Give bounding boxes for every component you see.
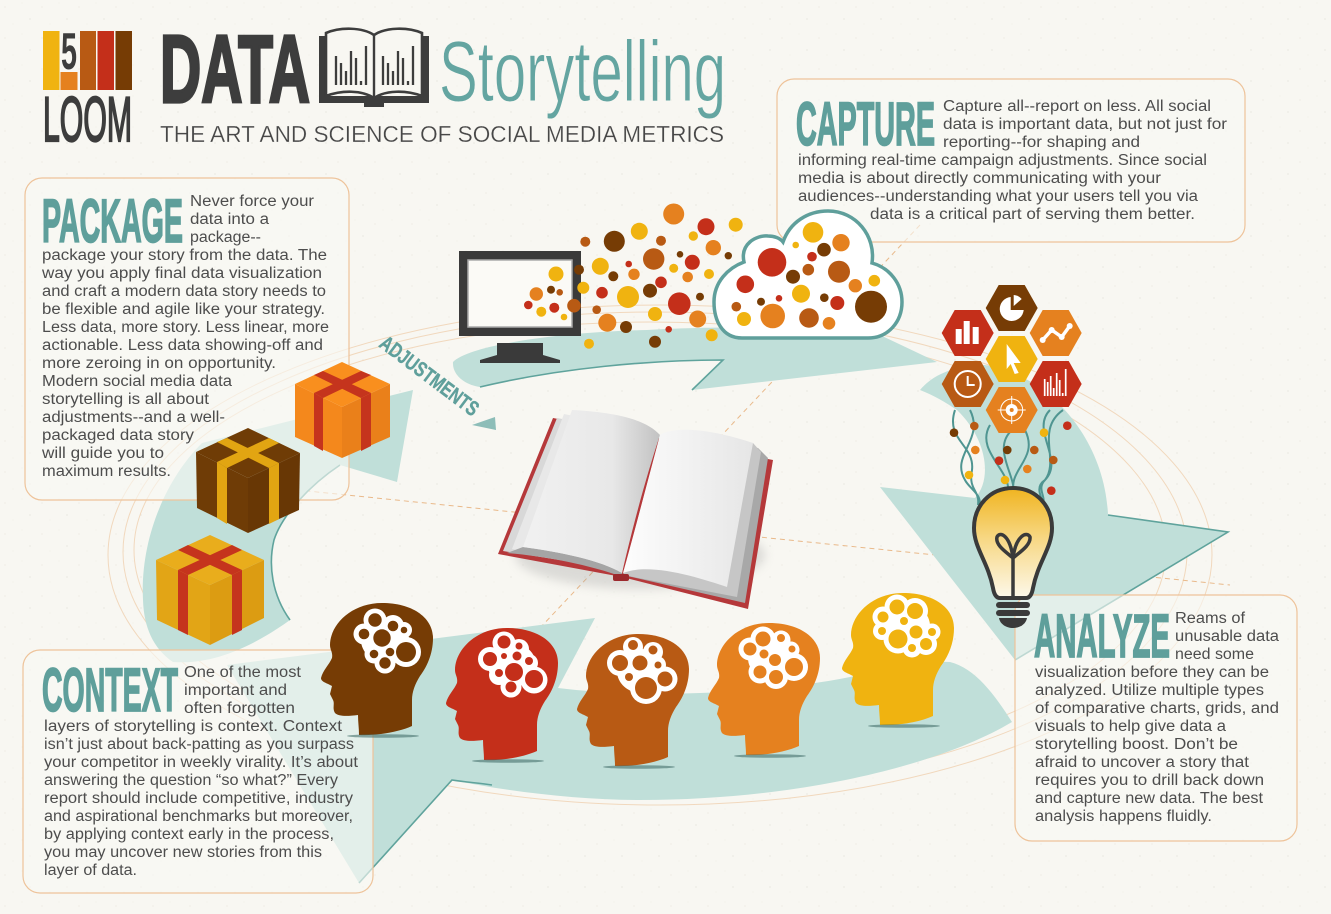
hexagon: cursor [986,336,1038,382]
body: capture: audiences--understanding what your users tell you via [798,188,1198,205]
hexagon: bar chart [942,310,994,356]
body: context: isn’t just about back-patting as you surpass [44,736,354,753]
arrow: package to capture [143,390,413,662]
icon: brown gift [196,428,300,533]
body: context: your competitor in weekly virality. It’s about [44,754,359,771]
body: context: answering the question “so what?” Every [44,772,338,789]
body: context: One of the most [184,664,302,681]
hexagon: column bars [1030,361,1082,407]
body: analyze: need some [1175,646,1254,663]
arrow: context to package [227,618,1012,883]
body: package: packaged data story [42,427,194,444]
text block: context: CONTEXT [42,656,178,724]
body: package: adjustments--and a well- [42,409,225,426]
body: package: will guide you to [41,445,164,462]
body: context: layer of data. [44,862,137,879]
body: context: and aspirational benchmarks but moreover, [44,808,353,825]
body: analyze: analysis happens fluidly. [1035,808,1212,825]
text block: package: PACKAGE [42,187,183,255]
body: package: Less data, more story. Less linear, more [42,319,329,336]
icon: open book [498,410,773,609]
title: DATA: DATA [160,16,310,123]
icon: orange gift [295,362,390,458]
label: adjustments: ADJUSTMENTS [375,332,483,421]
body: package: maximum results. [42,463,171,480]
title: Storytelling: Storytelling [439,24,726,120]
text block: context [42,656,359,879]
body: package: and craft a modern data story needs to [42,283,326,300]
head: yellow [842,593,954,728]
body: analyze: unusable data [1175,628,1279,645]
subtitle: THE ART AND SCIENCE OF SOCIAL MEDIA METRICS [160,121,724,147]
body: package: package-- [190,229,261,246]
head: burnt orange [577,634,689,769]
body: package [41,193,329,480]
body: analyze: storytelling boost. Don’t be [1035,736,1238,753]
body: capture: data is a critical part of serving them better. [870,206,1195,223]
head: red [446,628,558,763]
body: analyze: and capture new data. The best [1035,790,1264,807]
body: package: Never force your [190,193,314,210]
body: package: more zeroing in on opportunity. [42,355,276,372]
body: context: you may uncover new stories from this [44,844,322,861]
arrow: capture to analyze [453,328,937,390]
body: context: report should include competitive, industry [44,790,353,807]
arrow: analyze to context [880,365,1228,660]
body: capture: informing real-time campaign adjustments. Since social [798,152,1207,169]
icon: monitor [459,251,581,363]
head: brown [321,603,433,738]
wires and dots between hexagons and bulb [950,410,1072,520]
data dots flying from cloud to monitor [524,204,743,349]
body: context: often forgotten [184,700,295,717]
body: analyze: of comparative charts, grids, and [1035,700,1279,717]
text block: analyze: ANALYZE [1034,602,1170,670]
logo: 5 Loom: 5 [61,23,77,81]
text block: capture [796,90,1227,223]
body: context [44,664,359,879]
body: package: Modern social media data [42,373,232,390]
body: analyze: analyzed. Utilize multiple types [1035,682,1264,699]
body: analyze: visualization before they can be [1035,664,1269,681]
panel: package box [25,178,349,500]
head: orange [708,623,820,758]
body: capture: media is about directly communicating with your [798,170,1161,187]
panel: capture box [777,79,1245,242]
body: context: layers of storytelling is context. Context [44,718,343,735]
text: LOOM [43,85,132,155]
icon: light bulb [974,488,1052,628]
hexagon: line chart [1030,310,1082,356]
body: capture: data is important data, but not just for [943,116,1227,133]
body: package: actionable. Less data showing-off and [42,337,323,354]
body: package: way you apply final data visualization [41,265,322,282]
body: capture [798,98,1227,223]
body: package: storytelling is all about [42,391,210,408]
body: analyze: visuals to help give data a [1035,718,1226,735]
body: analyze [1035,610,1279,825]
body: analyze: Reams of [1175,610,1246,627]
heads row [321,593,954,769]
hexagon: pie chart [986,285,1038,331]
panel: analyze box [1015,595,1297,841]
icon: yellow gift [156,535,264,645]
body: capture: Capture all--report on less. All social [943,98,1211,115]
body: context: important and [184,682,287,699]
body: capture: reporting--for shaping and [943,134,1140,151]
hexagon: target [986,387,1038,433]
icon: hexagon cluster [942,285,1082,433]
panel: context box [23,650,373,893]
icon: cloud with data dots [714,211,902,338]
body: package: be flexible and agile like your strategy. [42,301,325,318]
body: package: data into a [190,211,269,228]
body: package: package your story from the data. The [42,247,327,264]
text block: capture: CAPTURE [796,90,935,158]
text block: package [41,187,329,480]
text block: analyze [1034,602,1279,825]
logo: 5 Loom [43,23,132,155]
icon: open book with bar charts [319,29,429,107]
body: context: by applying context early in the process, [44,826,334,843]
body: analyze: afraid to uncover a story that [1035,754,1250,771]
body: analyze: requires you to drill back down [1035,772,1264,789]
hexagon: clock [942,361,994,407]
